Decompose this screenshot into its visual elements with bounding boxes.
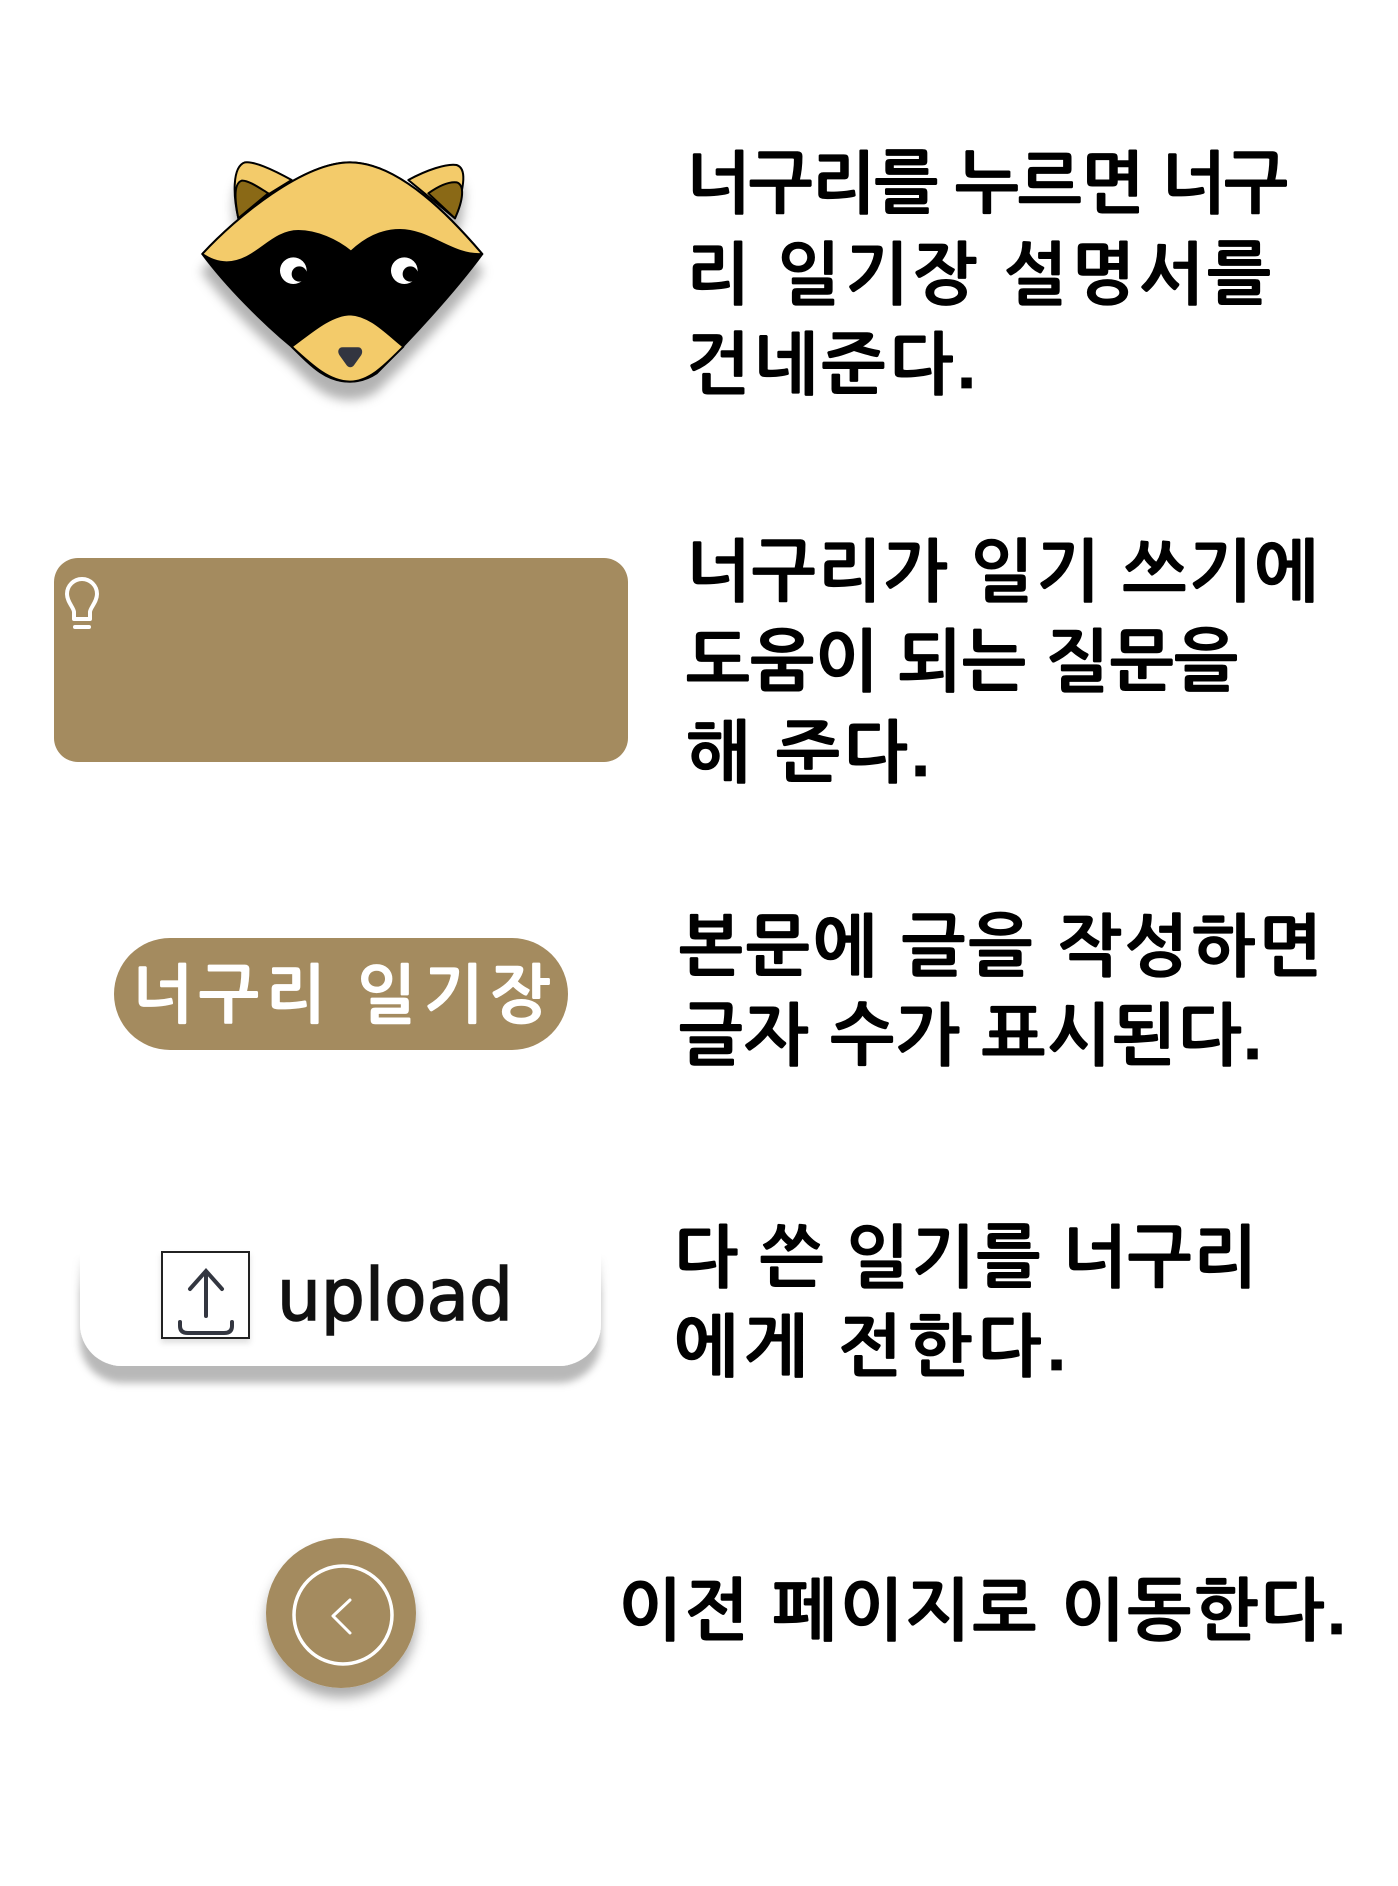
- text: question explanation: [686, 534, 1318, 791]
- text: character count explanation: 본문에 글을 작성하면: [679, 909, 1322, 985]
- text: upload explanation: [674, 1220, 1257, 1385]
- icon: light bulb: [67, 579, 97, 627]
- text: raccoon explanation: 건네준다.: [686, 327, 976, 403]
- button: upload: upload: [277, 1253, 513, 1337]
- text: raccoon explanation: 리 일기장 설명서를: [686, 237, 1271, 313]
- panel: question box: [54, 558, 628, 762]
- text: upload explanation: 에게 전한다.: [674, 1309, 1066, 1385]
- pill: diary title: [114, 938, 568, 1050]
- button: back: [266, 1538, 416, 1688]
- text: back explanation: 이전 페이지로 이동한다.: [618, 1573, 1346, 1649]
- text: question explanation: 너구리가 일기 쓰기에: [686, 534, 1318, 610]
- text: raccoon explanation: [686, 146, 1288, 403]
- text: character count explanation: [679, 909, 1322, 1074]
- text: character count explanation: 글자 수가 표시된다.: [679, 998, 1262, 1074]
- icon: raccoon head: [202, 162, 482, 382]
- text: question explanation: 도움이 되는 질문을: [686, 624, 1238, 700]
- text: upload explanation: 다 쓴 일기를 너구리: [674, 1220, 1257, 1296]
- text: raccoon explanation: 너구리를 누르면 너구: [686, 146, 1288, 222]
- pill: diary title: 너구리 일기장: [132, 959, 550, 1031]
- button: upload: [70, 1194, 611, 1366]
- text: question explanation: 해 준다.: [686, 715, 930, 791]
- icon: upload: [162, 1252, 249, 1338]
